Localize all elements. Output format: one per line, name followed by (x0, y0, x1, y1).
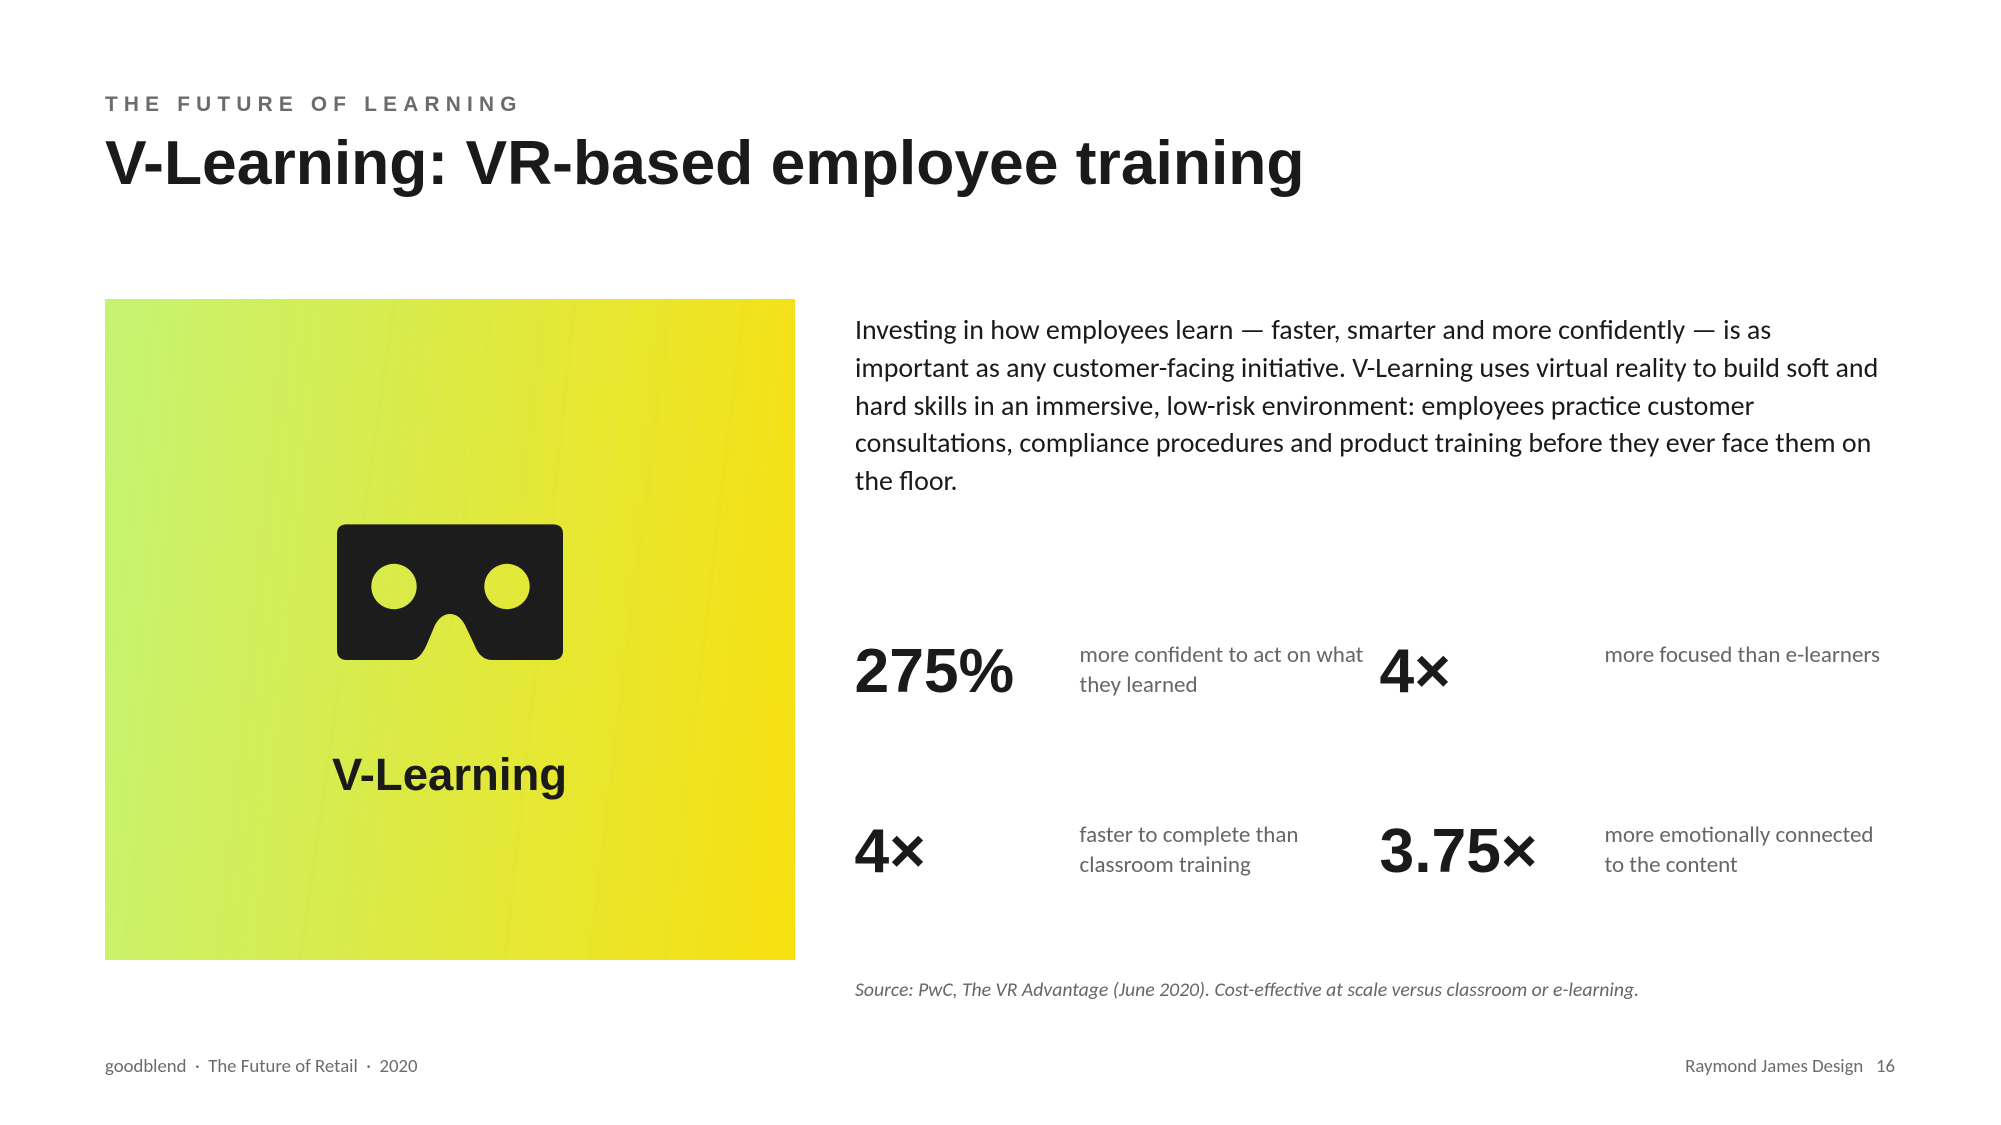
stat: 3.75x: more emotionally connected (1604, 821, 1874, 849)
stat: 4x focused (1380, 637, 1880, 706)
intro paragraph: Investing in how employees learn — faster, smarter and more confidently — is as (855, 312, 1771, 347)
source note: Source: PwC, The VR Advantage (June 2020). Cost-effective at scale versus classroom or e-learning. (855, 978, 1639, 1002)
stat: 4x faster: classroom training (1080, 851, 1251, 879)
eyebrow heading: THE FUTURE OF LEARNING (105, 93, 523, 116)
stat: 275%: more confident to act on what (1080, 641, 1363, 669)
stat: 3.75x: 3.75× (1380, 817, 1537, 886)
stat: 3.75x (1380, 817, 1874, 886)
stat: 4x faster: 4× (854, 817, 926, 886)
stat: 4x focused: more focused than e-learners (1604, 641, 1880, 669)
stat: 4x faster: faster to complete than (1080, 821, 1298, 849)
title: V-Learning: VR-based employee training (105, 129, 1305, 198)
stat: 275%: they learned (1080, 671, 1198, 699)
panel: V-Learning gradient card (105, 299, 795, 960)
intro paragraph: hard skills in an immersive, low-risk environment: employees practice customer (855, 388, 1754, 423)
intro paragraph (855, 312, 1878, 498)
stat: 4x faster (854, 817, 1298, 886)
icon: VR headset (337, 524, 563, 660)
footer right: Raymond James Design 16 (1685, 1055, 1895, 1078)
intro paragraph: important as any customer-facing initiative. V-Learning uses virtual reality to build soft and (855, 350, 1878, 385)
stat: 275%: 275% (854, 637, 1014, 706)
stat: 4x focused: 4× (1380, 637, 1451, 706)
panel label: V-Learning (332, 748, 567, 800)
stat: 275% (854, 637, 1363, 706)
intro paragraph: consultations, compliance procedures and product training before they ever face them on (855, 425, 1871, 460)
stat: 3.75x: to the content (1604, 851, 1738, 879)
intro paragraph: the floor. (855, 463, 958, 498)
footer left: goodblend · The Future of Retail · 2020 (105, 1055, 417, 1078)
